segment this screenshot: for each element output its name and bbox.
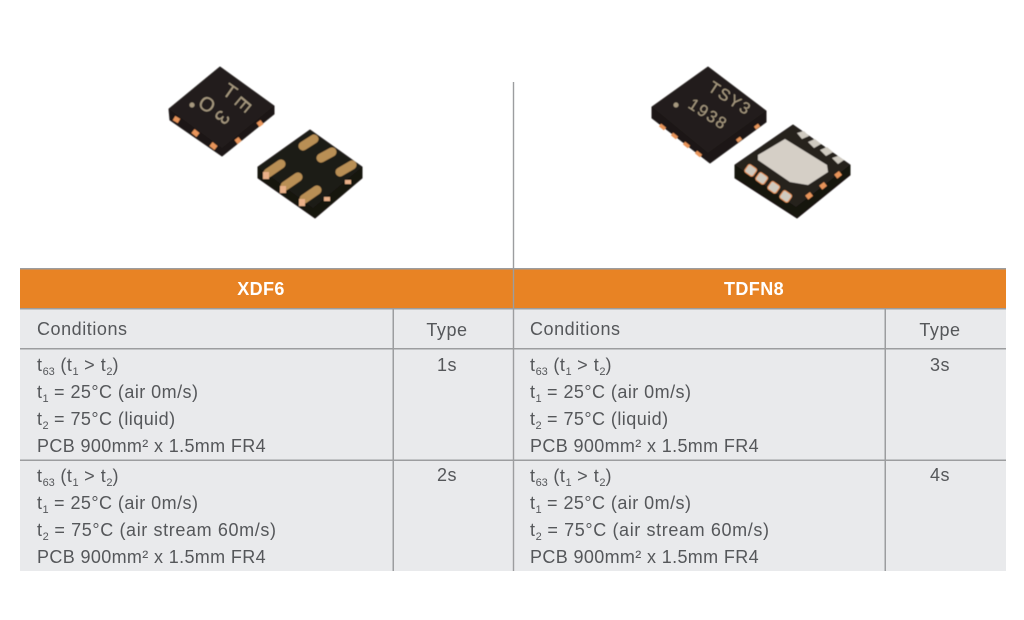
text block: XDF6 liquid conditions: [37, 355, 266, 456]
text block: TDFN8 liquid conditions: = 25°C (air 0m/s): [542, 382, 691, 402]
text block: XDF6 liquid conditions: = 25°C (air 0m/s): [49, 382, 198, 402]
text block: TDFN8 air stream conditions: > t: [572, 466, 599, 486]
text block: TDFN8 air stream conditions: = 25°C (air 0m/s): [542, 493, 691, 513]
value: XDF6 air stream type: 2s: [437, 465, 457, 485]
value: TDFN8 liquid type: 3s: [930, 355, 950, 375]
icon: XDF6 chip, top view: E: [230, 92, 255, 116]
text block: TDFN8 liquid conditions: > t: [572, 355, 599, 375]
text: TSY3 marking: TSY3: [705, 78, 755, 119]
text block: TDFN8 air stream conditions: 1: [565, 477, 572, 489]
text block: XDF6 liquid conditions: > t: [79, 355, 106, 375]
text block: XDF6 air stream conditions: ): [112, 466, 119, 486]
icon: XDF6 chip, top view: T: [218, 80, 241, 105]
text block: TDFN8 liquid conditions: t: [530, 355, 536, 375]
column labels: left table: Type: [426, 320, 468, 340]
text block: TDFN8 air stream conditions: PCB 900mm² x 1.5mm FR4: [530, 547, 759, 567]
text block: XDF6 air stream conditions: = 25°C (air 0m/s): [49, 493, 198, 513]
icon: XDF6 chip, top view: O: [194, 92, 219, 119]
icon: TDFN8 chip, top view: [652, 67, 766, 163]
text block: TDFN8 liquid conditions: 1: [535, 393, 542, 405]
text block: TDFN8 air stream conditions: t: [530, 493, 535, 513]
text block: XDF6 air stream conditions: > t: [79, 466, 106, 486]
text block: TDFN8 liquid conditions: t: [530, 382, 535, 402]
text block: TDFN8 air stream conditions: (t: [548, 466, 565, 486]
text block: TDFN8 air stream conditions: [530, 466, 770, 567]
text block: XDF6 air stream conditions: 2: [106, 477, 112, 489]
text block: XDF6 liquid conditions: (t: [55, 355, 72, 375]
text block: XDF6 air stream conditions: 1: [42, 504, 49, 516]
text block: XDF6 liquid conditions: 63: [43, 366, 55, 378]
header: XDF6: XDF6: [237, 279, 285, 299]
icon: TDFN8 chip, bottom view: [735, 125, 850, 218]
text block: XDF6 liquid conditions: 2: [106, 366, 112, 378]
table background: [20, 309, 1006, 571]
text block: TDFN8 liquid conditions: [530, 355, 759, 456]
text block: TDFN8 liquid conditions: (t: [548, 355, 565, 375]
value: TDFN8 air stream type: 4s: [930, 465, 950, 485]
column labels: left table: [37, 319, 468, 340]
text block: TDFN8 liquid conditions: t: [530, 409, 535, 429]
icon: XDF6 chip, bottom view: [258, 130, 362, 218]
header: TDFN8: [514, 269, 1006, 309]
text block: XDF6 air stream conditions: t: [37, 493, 42, 513]
text block: XDF6 liquid conditions: 2: [42, 420, 49, 432]
column labels: right table: Type: [919, 320, 961, 340]
text block: TDFN8 liquid conditions: 63: [536, 366, 548, 378]
text: 1938 marking: 1938: [685, 95, 731, 134]
text block: XDF6 air stream conditions: PCB 900mm² x 1.5mm FR4: [37, 547, 266, 567]
text block: XDF6 air stream conditions: 1: [72, 477, 79, 489]
text block: XDF6 liquid conditions: t: [37, 382, 42, 402]
column labels: right table: Conditions: [530, 319, 621, 339]
text block: TDFN8 liquid conditions: = 75°C (liquid): [542, 409, 669, 429]
value: XDF6 liquid type: 1s: [437, 355, 457, 375]
text block: TDFN8 air stream conditions: 1: [535, 504, 542, 516]
text block: TDFN8 liquid conditions: 2: [535, 420, 542, 432]
header: XDF6: [20, 269, 513, 309]
text block: XDF6 air stream conditions: 2: [43, 531, 49, 543]
icon: XDF6 chip, top view: [169, 67, 274, 156]
text block: TDFN8 air stream conditions: 63: [536, 477, 548, 489]
text block: TDFN8 air stream conditions: t: [530, 466, 536, 486]
text block: TDFN8 liquid conditions: ): [605, 355, 612, 375]
text block: XDF6 air stream conditions: [37, 466, 277, 567]
text block: XDF6 air stream conditions: t: [37, 520, 43, 540]
text block: TDFN8 liquid conditions: PCB 900mm² x 1.5mm FR4: [530, 436, 759, 456]
text block: XDF6 liquid conditions: t: [37, 355, 43, 375]
text block: TDFN8 air stream conditions: t: [530, 520, 536, 540]
text block: XDF6 liquid conditions: 1: [42, 393, 49, 405]
column labels: right table: [530, 319, 961, 340]
text block: TDFN8 air stream conditions: 2: [599, 477, 605, 489]
text block: XDF6 liquid conditions: t: [37, 409, 42, 429]
text block: TDFN8 air stream conditions: ): [605, 466, 612, 486]
text block: XDF6 air stream conditions: = 75°C (air stream 60m/s): [49, 520, 277, 540]
text block: TDFN8 air stream conditions: 2: [536, 531, 542, 543]
thermal pad: [758, 139, 828, 185]
text block: XDF6 air stream conditions: 63: [43, 477, 55, 489]
column labels: left table: Conditions: [37, 319, 128, 339]
text block: XDF6 air stream conditions: t: [37, 466, 43, 486]
text block: XDF6 liquid conditions: PCB 900mm² x 1.5mm FR4: [37, 436, 266, 456]
text block: XDF6 liquid conditions: 1: [72, 366, 79, 378]
header: TDFN8: TDFN8: [724, 279, 784, 299]
text block: TDFN8 air stream conditions: = 75°C (air stream 60m/s): [542, 520, 770, 540]
text block: XDF6 liquid conditions: = 75°C (liquid): [49, 409, 176, 429]
text block: XDF6 air stream conditions: (t: [55, 466, 72, 486]
text block: XDF6 liquid conditions: ): [112, 355, 119, 375]
text block: TDFN8 liquid conditions: 1: [565, 366, 572, 378]
text block: TDFN8 liquid conditions: 2: [599, 366, 605, 378]
icon: XDF6 chip, top view: 3: [210, 106, 234, 128]
